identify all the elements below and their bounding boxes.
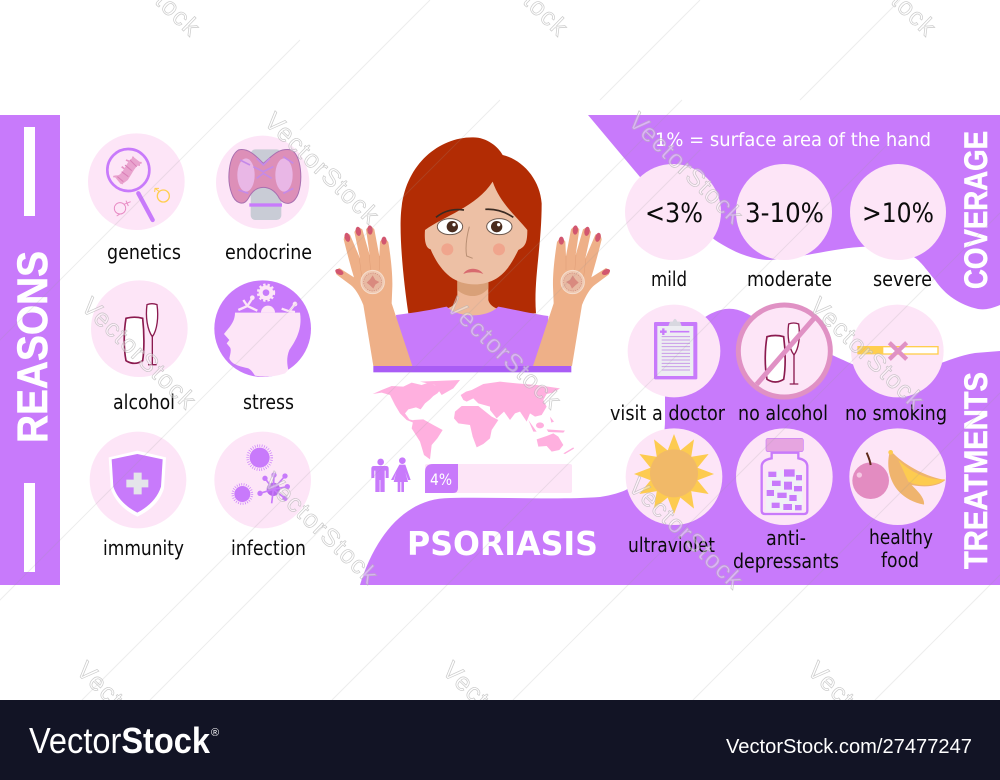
panel: reasons sidebar xyxy=(0,115,60,585)
text: visit a doctor: visit a doctor xyxy=(610,401,726,425)
text: genetics: genetics xyxy=(107,240,181,264)
icon: no smoking xyxy=(851,305,944,397)
icon: antidepressant pill jar xyxy=(736,428,833,525)
text: anti-depressants: anti- xyxy=(766,526,806,550)
shirt xyxy=(396,307,548,366)
text: endocrine: endocrine xyxy=(225,240,312,264)
footer image id: VectorStock.com/27477247 xyxy=(726,736,972,758)
watermark overlay: VectorStock xyxy=(623,472,748,595)
text: healthy food: healthy xyxy=(869,525,933,549)
left hand xyxy=(334,225,412,366)
right eye xyxy=(485,209,513,235)
left eye xyxy=(436,210,464,235)
text: no alcohol: no alcohol xyxy=(738,401,828,425)
face xyxy=(425,182,527,284)
text: no smoking: no smoking xyxy=(845,401,947,425)
watermark overlay: VectorStock xyxy=(437,656,562,779)
severity labels: severe xyxy=(873,267,932,291)
text: healthy food: food xyxy=(881,548,919,572)
severity labels xyxy=(651,267,932,291)
text: alcohol: alcohol xyxy=(113,390,175,414)
icon: genetics xyxy=(88,133,185,230)
cheeks, nose and mouth xyxy=(441,227,505,274)
icon: infection viruses xyxy=(214,432,311,528)
panel: reasons icons and labels xyxy=(88,133,312,560)
icon: no alcohol xyxy=(738,305,830,397)
severity labels: mild xyxy=(651,267,687,291)
coverage severity circles: >10% xyxy=(862,198,934,229)
watermark overlay: VectorStock xyxy=(804,292,929,415)
text: stress: stress xyxy=(243,390,294,414)
desk bar xyxy=(373,366,571,372)
watermark overlay: VectorStock xyxy=(71,656,196,779)
icon: healthy food xyxy=(849,428,946,525)
prevalence bar 4% xyxy=(425,464,572,493)
coverage heading note: 1% = surface area of the hand xyxy=(655,129,931,151)
icon: man and woman figures xyxy=(371,457,411,492)
icon: alcohol glasses xyxy=(91,280,188,377)
panel: reasons sidebar: REASONS xyxy=(9,251,57,443)
heading: treatments: TREATMENTS xyxy=(958,372,994,569)
icon: immunity shield xyxy=(90,432,186,528)
text: anti-depressants xyxy=(733,526,839,573)
watermark overlay: VectorStock xyxy=(259,107,384,230)
watermark overlay: VectorStock xyxy=(802,656,927,779)
neck xyxy=(443,277,500,323)
footer logo: VectorStock xyxy=(29,720,211,761)
text: ultraviolet: ultraviolet xyxy=(628,533,715,557)
icon: visit a doctor clipboard xyxy=(628,305,720,397)
watermark overlay: VectorStock xyxy=(623,107,748,230)
icon: ultraviolet sun xyxy=(626,428,722,525)
coverage severity circles xyxy=(625,164,946,260)
woman with psoriasis on hands xyxy=(334,137,611,372)
coverage severity circles: <3% xyxy=(645,198,703,229)
panel: treatments and title background xyxy=(360,309,1000,585)
coverage severity circles: 3-10% xyxy=(745,198,824,229)
text: infection: infection xyxy=(231,536,306,560)
text: immunity: immunity xyxy=(103,536,184,560)
heading: coverage: COVERAGE xyxy=(958,131,994,289)
panel: coverage background xyxy=(588,115,1000,309)
footer band xyxy=(0,700,1000,780)
prevalence bar 4%: 4% xyxy=(430,470,452,489)
right hand xyxy=(533,225,611,366)
title: PSORIASIS xyxy=(407,524,598,563)
world map xyxy=(373,380,574,459)
icon: stress head xyxy=(214,280,311,377)
text: healthy food xyxy=(869,525,933,572)
text: anti-depressants: depressants xyxy=(733,549,839,573)
severity labels: moderate xyxy=(747,267,832,291)
watermark overlay: VectorStock xyxy=(441,292,566,415)
watermark overlay: VectorStock xyxy=(76,292,201,415)
watermark overlay: VectorStock xyxy=(258,467,383,590)
registered mark: ® xyxy=(211,727,219,739)
icon: endocrine thyroid xyxy=(216,136,309,229)
hair xyxy=(401,137,542,313)
